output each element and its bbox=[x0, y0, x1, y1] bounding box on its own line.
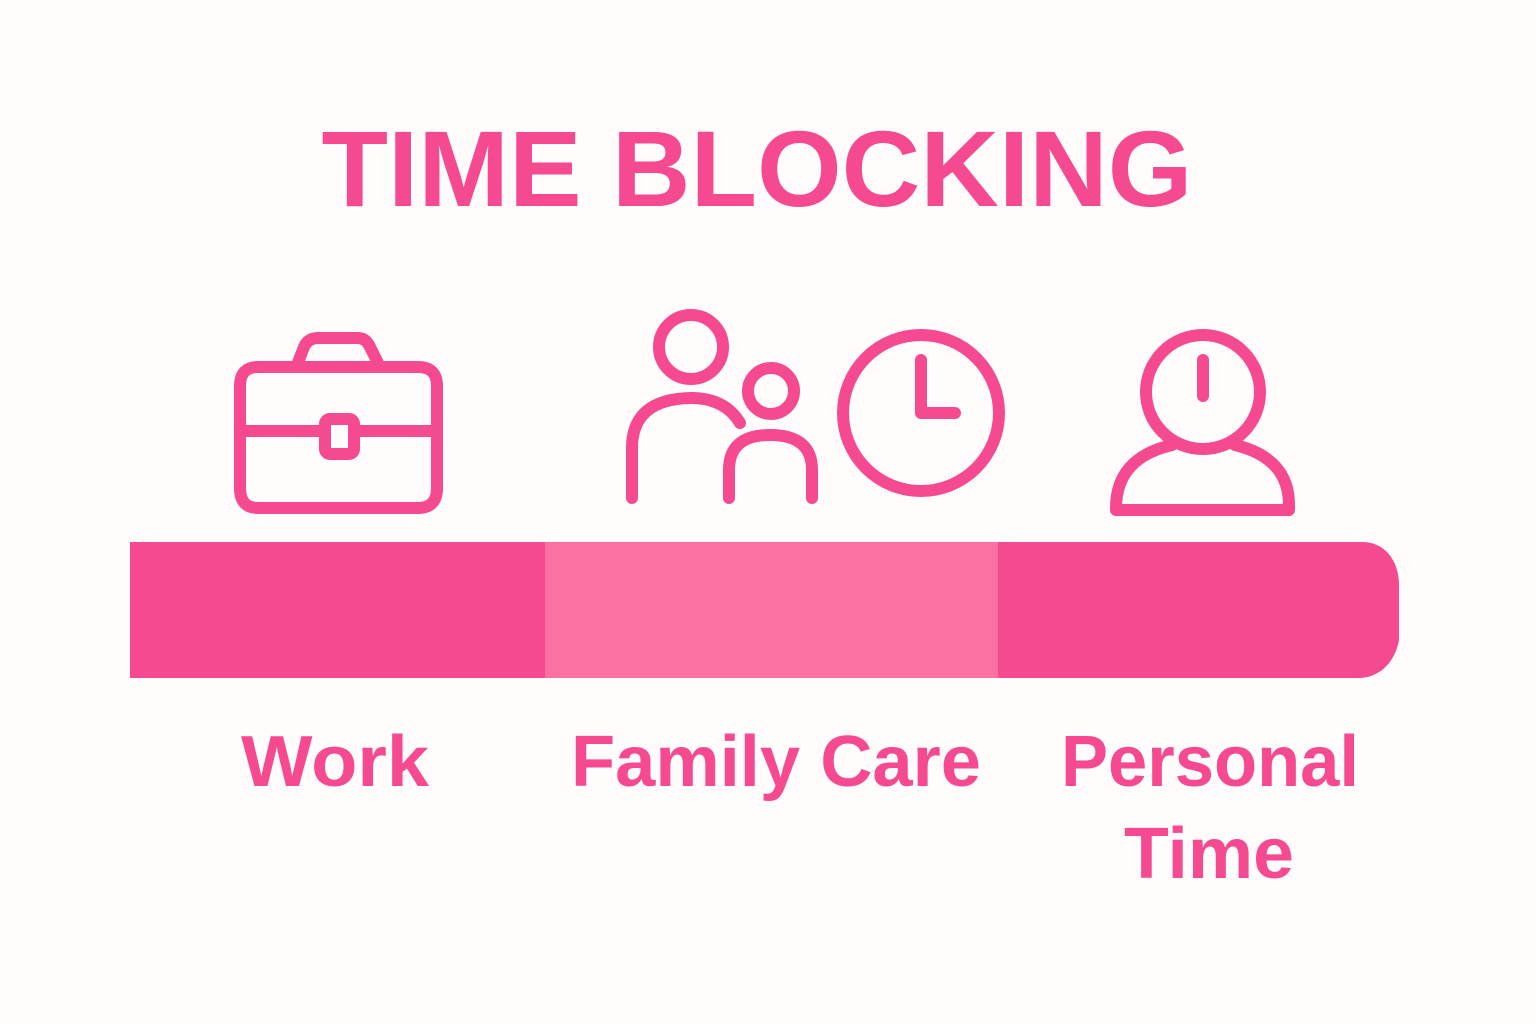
block: work bbox=[130, 542, 546, 678]
label: personal time bbox=[1061, 722, 1359, 894]
block: family care bbox=[545, 542, 999, 678]
timeline bar bbox=[130, 542, 1399, 678]
label: family care: Family Care bbox=[571, 722, 981, 802]
icon: parent and child bbox=[632, 315, 812, 498]
label: work: Work bbox=[241, 722, 430, 802]
title: TIME BLOCKING bbox=[322, 108, 1192, 229]
icon: person with clock head bbox=[1116, 335, 1289, 510]
icon: clock bbox=[843, 335, 999, 491]
label: personal time: Time bbox=[1124, 814, 1294, 894]
icon: briefcase bbox=[240, 338, 437, 508]
block: personal time bbox=[998, 542, 1399, 678]
label: personal time: Personal bbox=[1061, 722, 1359, 802]
